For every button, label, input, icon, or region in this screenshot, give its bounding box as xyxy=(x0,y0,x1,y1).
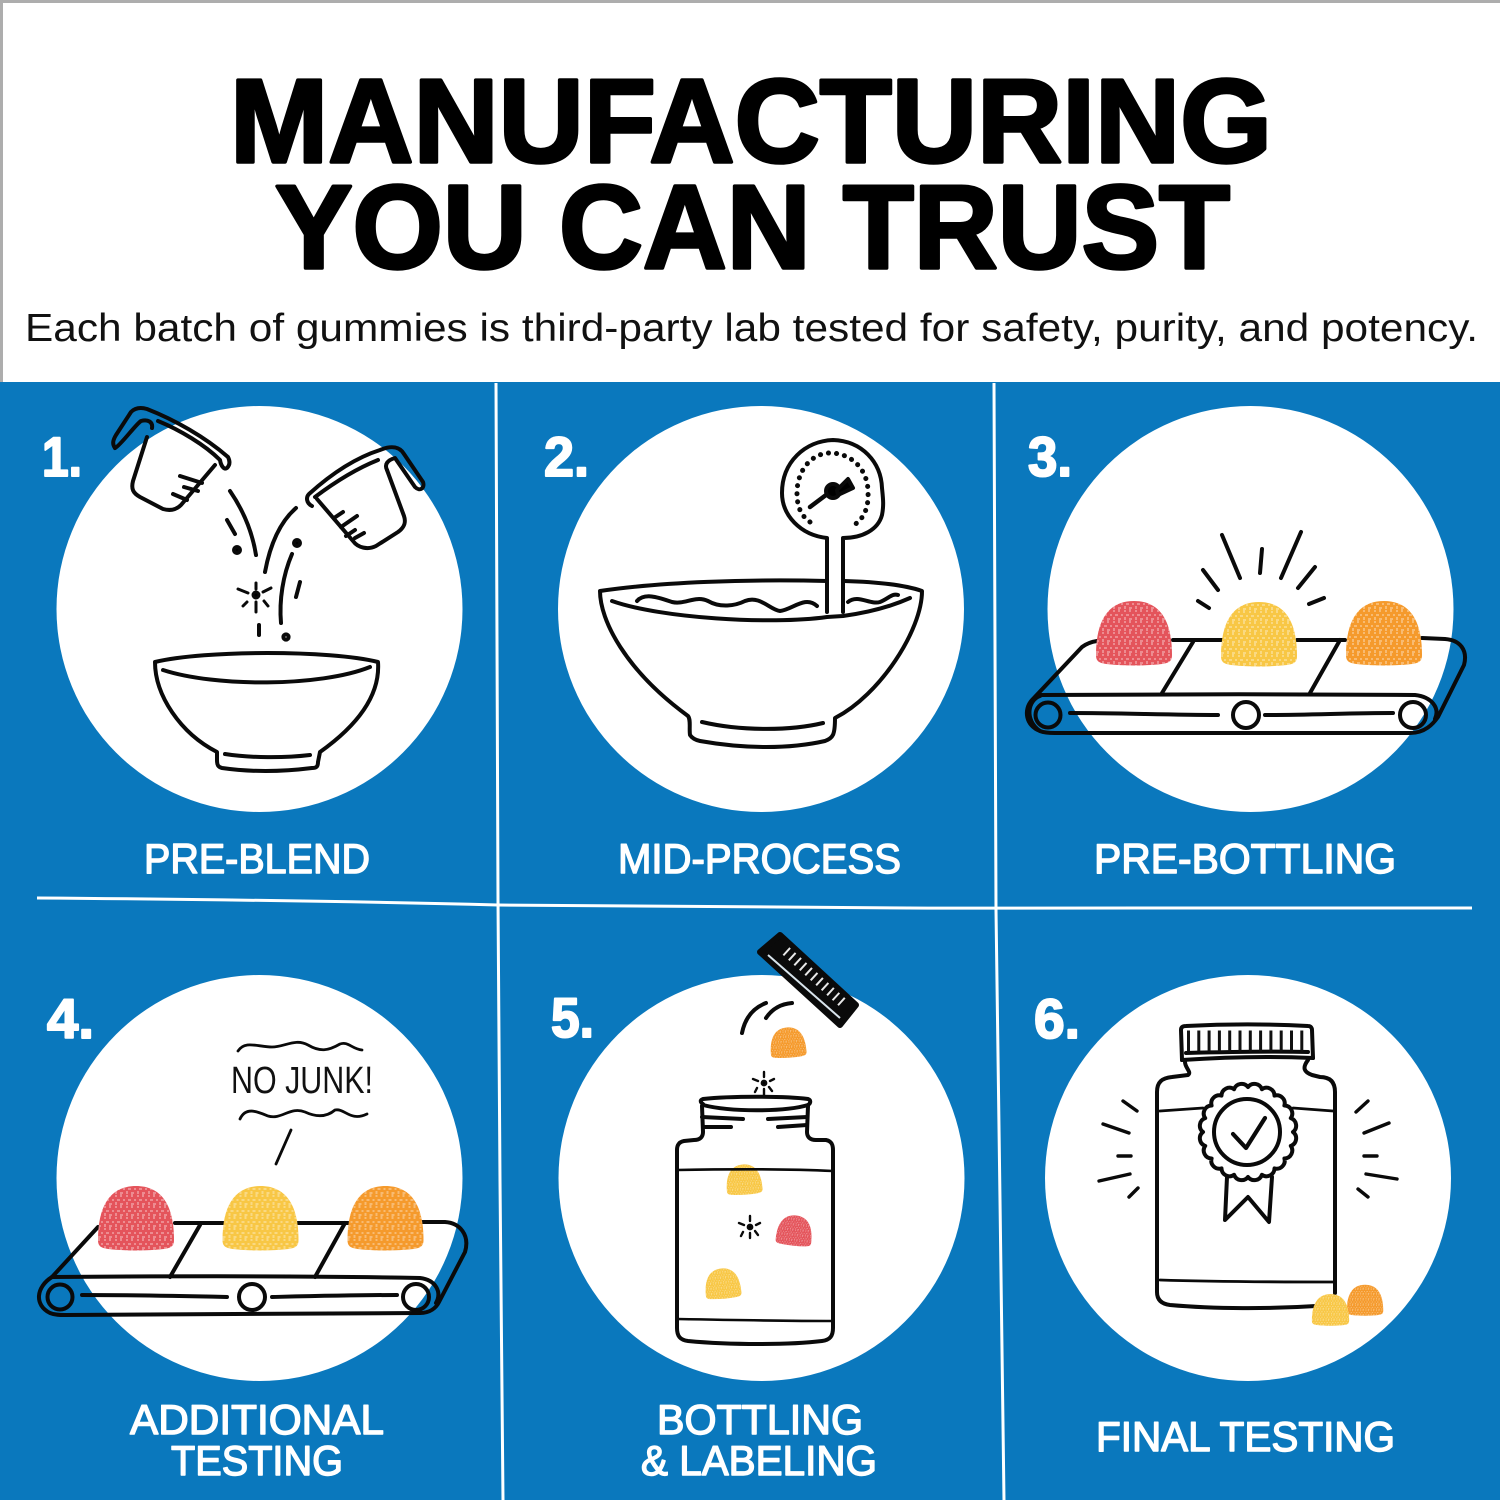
label: pre-bottling: PRE-BOTTLING xyxy=(1094,835,1396,882)
step 6 panel: final testing xyxy=(1034,975,1451,1460)
white circle 6 xyxy=(1045,975,1451,1381)
callout: no junk: NO JUNK! xyxy=(231,1060,373,1102)
step 1 panel: pre-blend xyxy=(42,406,462,882)
step 2 panel: mid-process xyxy=(544,406,964,882)
step 5 panel: bottling and labeling xyxy=(551,935,964,1484)
white circle 5 xyxy=(558,975,964,1381)
step number 6: 6. xyxy=(1034,987,1080,1050)
header panel xyxy=(0,0,1500,383)
step 3 panel: pre-bottling xyxy=(1027,406,1465,882)
label: additional testing: ADDITIONAL xyxy=(130,1396,384,1443)
label: final testing: FINAL TESTING xyxy=(1096,1413,1395,1460)
title xyxy=(230,55,1272,294)
grid divider lines xyxy=(37,383,1472,1500)
icon: closed jar xyxy=(1157,1024,1335,1308)
icon: left measuring cup xyxy=(113,408,229,510)
step number 2: 2. xyxy=(544,425,589,488)
icon: conveyor belt xyxy=(1027,638,1465,733)
step number 3: 3. xyxy=(1028,425,1072,488)
label: additional testing: TESTING xyxy=(171,1437,343,1484)
step number 1: 1. xyxy=(42,425,82,488)
icon: conveyor belt xyxy=(39,1222,466,1315)
icon: quality seal xyxy=(1200,1084,1296,1222)
label: bottling and labeling xyxy=(641,1396,877,1484)
callout: no junk xyxy=(231,1042,373,1164)
blue background panel xyxy=(0,382,1500,1500)
icon: shine rays xyxy=(1198,532,1324,608)
step number 5: 5. xyxy=(551,986,594,1049)
step number 4: 4. xyxy=(47,987,94,1050)
white circle 1 xyxy=(56,406,462,812)
icon: sparkle xyxy=(238,583,271,612)
gummies on belt xyxy=(98,1186,424,1250)
icon: sparkle top xyxy=(753,1072,774,1097)
title: YOU CAN TRUST xyxy=(275,161,1230,294)
label: bottling and labeling: BOTTLING xyxy=(657,1396,863,1443)
white circle 4 xyxy=(56,975,462,1381)
gummies on belt xyxy=(1096,601,1422,666)
white circle 3 xyxy=(1048,406,1454,812)
white circle 2 xyxy=(558,406,964,812)
motion arcs xyxy=(742,1003,792,1033)
icon: mixing bowl xyxy=(155,653,378,771)
pouring ingredients xyxy=(227,491,300,640)
label: pre-blend: PRE-BLEND xyxy=(144,835,370,882)
label: bottling and labeling: & LABELING xyxy=(641,1437,877,1484)
icon: large bowl xyxy=(600,580,922,747)
icon: sparkle inside jar xyxy=(739,1216,760,1238)
gummies beside jar xyxy=(1312,1285,1383,1326)
icon: right measuring cup xyxy=(307,447,423,548)
icon: bottle lid xyxy=(760,935,856,1025)
label: additional testing xyxy=(130,1396,384,1484)
title: MANUFACTURING xyxy=(230,55,1272,188)
icon: shine rays xyxy=(1099,1101,1397,1197)
icon: open jar xyxy=(677,1097,833,1344)
falling gummies xyxy=(704,1026,814,1300)
label: mid-process: MID-PROCESS xyxy=(618,835,901,882)
icon: pressure gauge xyxy=(782,440,883,612)
step 4 panel: additional testing xyxy=(39,975,466,1484)
subtitle: Each batch of gummies is third-party lab tested for safety, purity, and potency. xyxy=(25,307,1478,350)
